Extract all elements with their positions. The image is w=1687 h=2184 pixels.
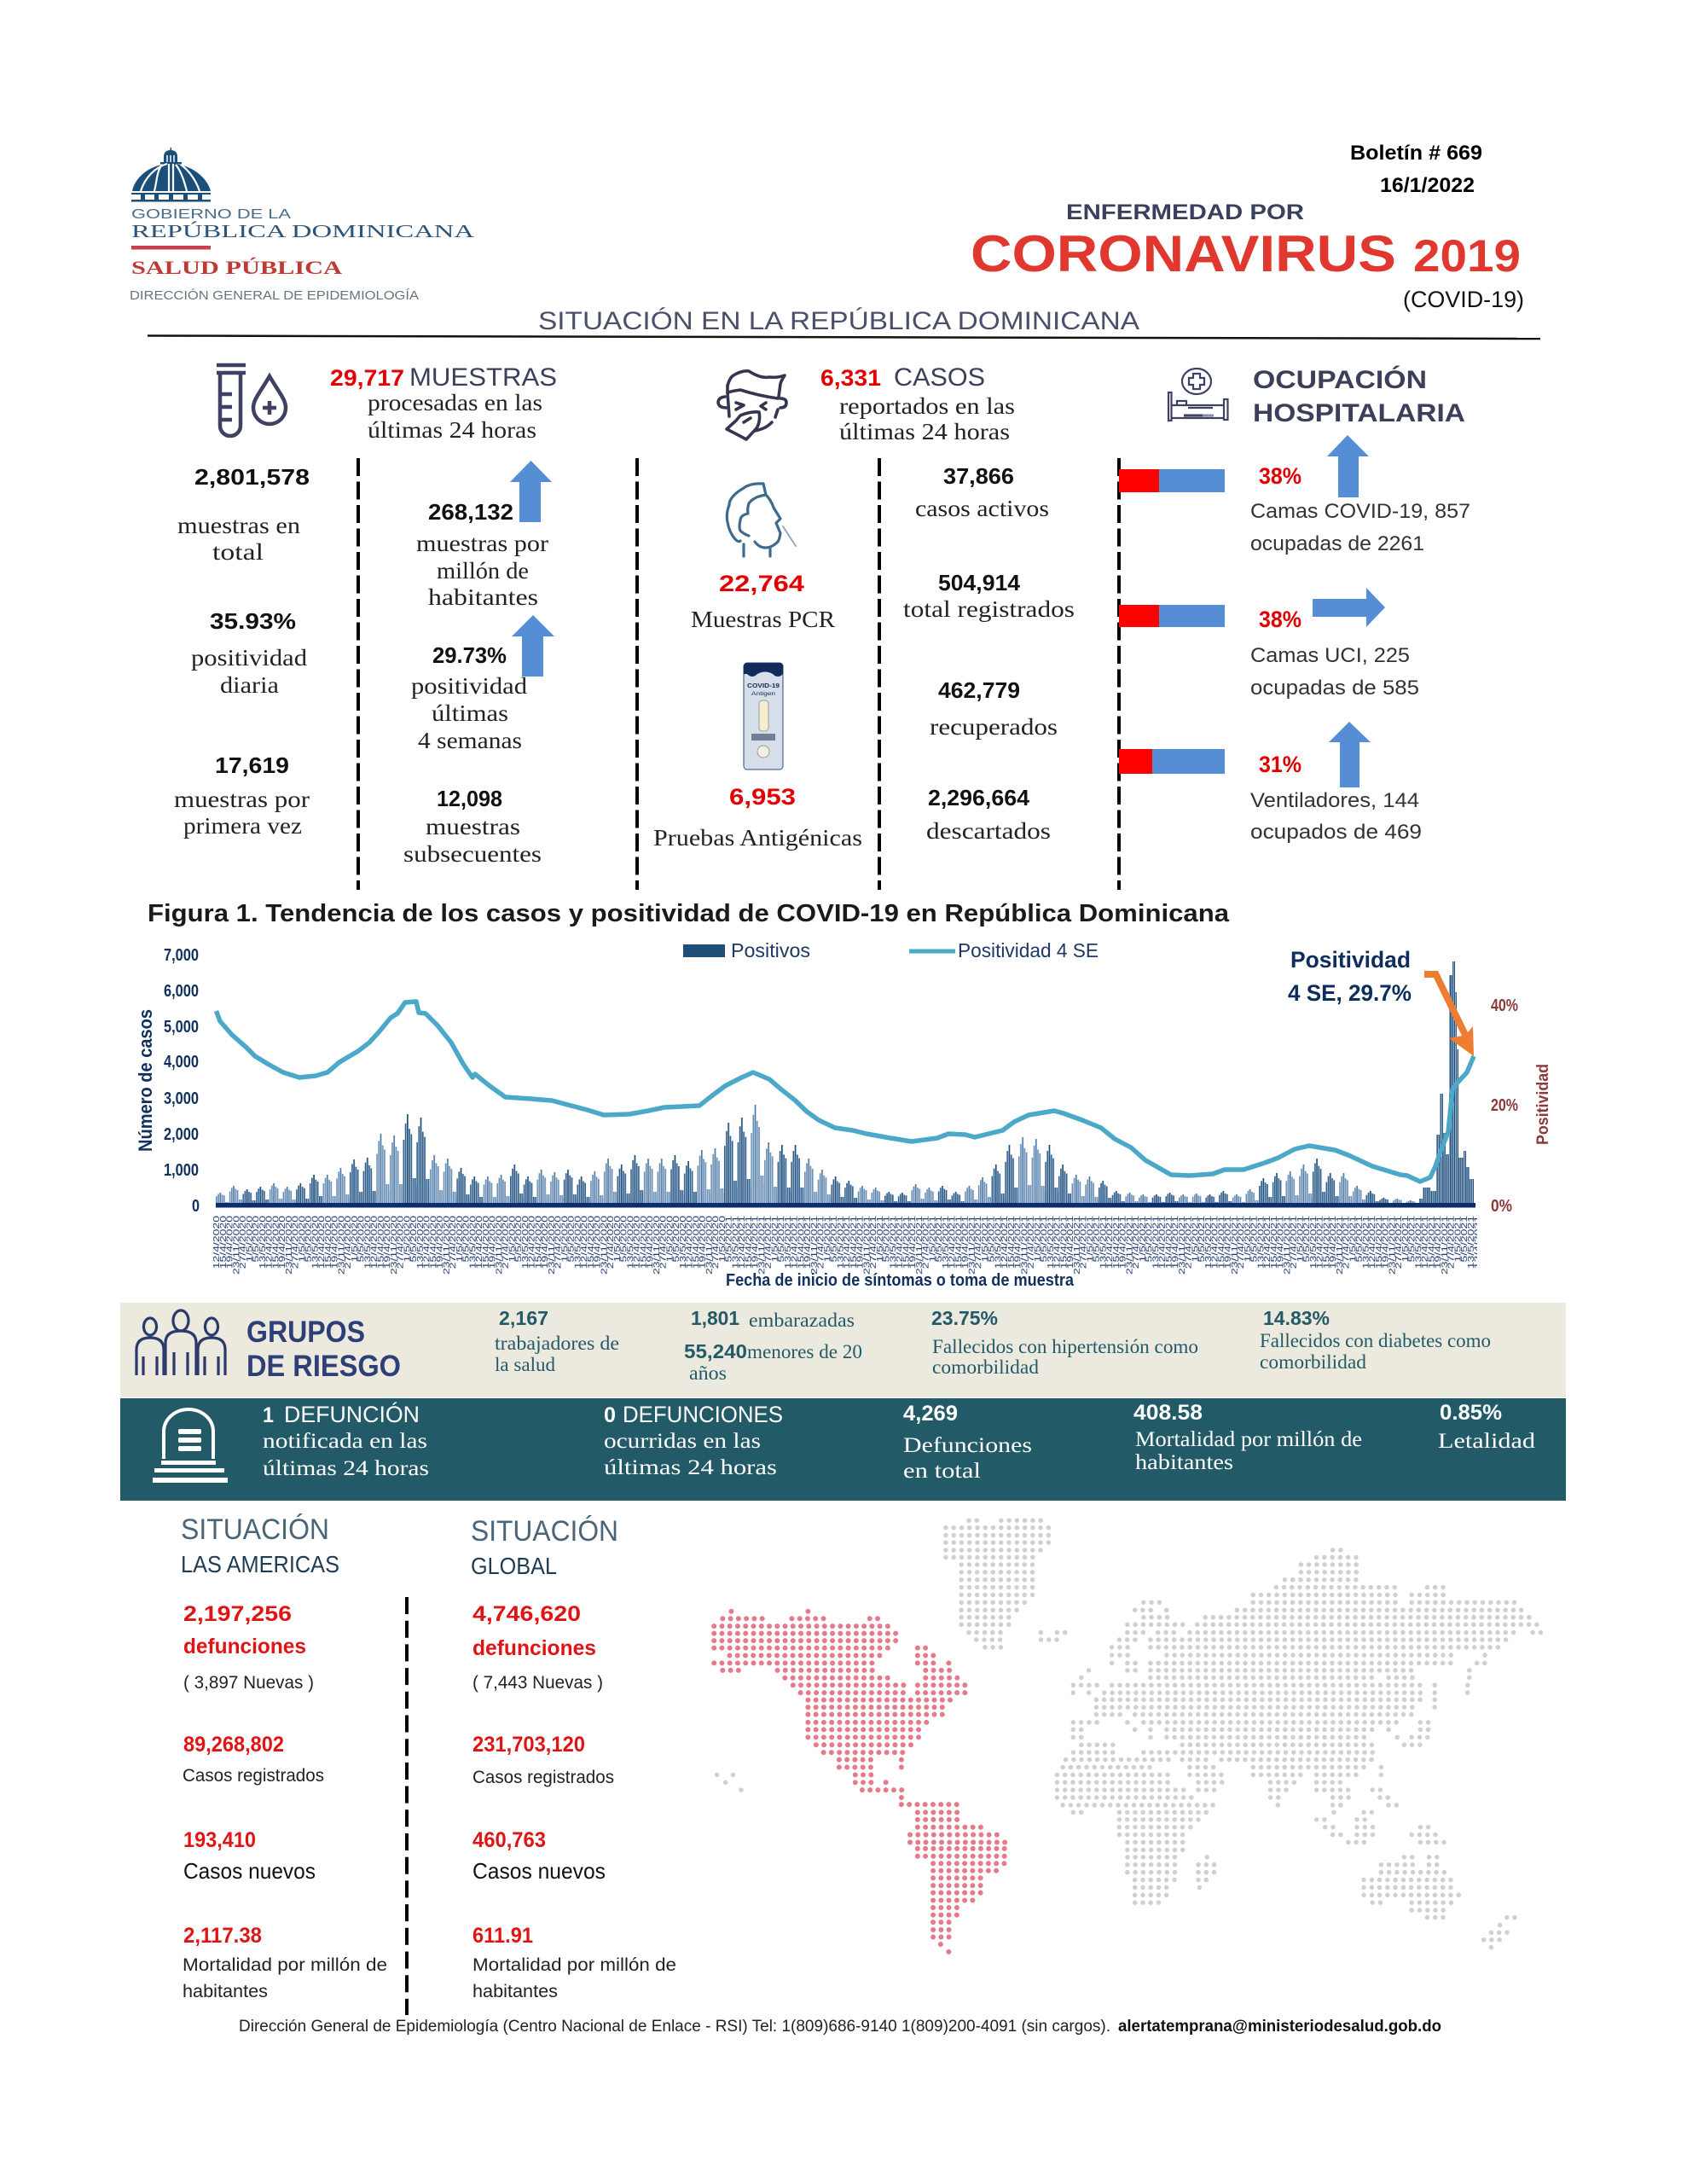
icon: group of people bbox=[136, 1310, 225, 1375]
panel: ocupación hospitalaria: HOSPITALARIA bbox=[1253, 399, 1465, 427]
footer: alertatemprana@ministeriodesalud.gob.do bbox=[1118, 2018, 1441, 2036]
casos heading: 6,331 bbox=[820, 365, 881, 391]
right axis labels: 0% bbox=[1491, 1197, 1512, 1216]
hospital heading: OCUPACIÓN bbox=[1253, 365, 1427, 394]
panel: grupos de riesgo: comorbilidad bbox=[932, 1356, 1040, 1378]
bulletin number and date: 16/1/2022 bbox=[1380, 174, 1475, 197]
stat: hypertension: 23.75% bbox=[931, 1307, 998, 1329]
panel: muestras: diaria bbox=[220, 672, 279, 698]
stat: active cases: 37,866 bbox=[943, 463, 1014, 489]
right axis labels: 40% bbox=[1491, 996, 1518, 1015]
stat: discarded: 2,296,664 bbox=[928, 785, 1030, 810]
arrow: up positivity bbox=[512, 615, 554, 677]
panel: muestras: habitantes bbox=[428, 584, 538, 610]
panel: defunciones: Defunciones bbox=[903, 1434, 1032, 1457]
axis baseline bbox=[216, 1203, 1475, 1208]
panel: muestras: 4 semanas bbox=[418, 728, 522, 753]
panel: casos bbox=[653, 363, 1075, 851]
bar: camas uci bbox=[1119, 605, 1225, 627]
panel: ocupación hospitalaria: Camas COVID-19, 857 bbox=[1250, 500, 1470, 523]
panel: situación las américas: Casos nuevos bbox=[183, 1858, 316, 1884]
panel: grupos de riesgo: Fallecidos con diabetes como bbox=[1260, 1330, 1491, 1351]
panel: situación global: defunciones bbox=[472, 1636, 596, 1660]
left axis labels: 4,000 bbox=[164, 1053, 199, 1072]
heading: SITUACIÓN bbox=[471, 1515, 618, 1548]
arrow: up samples bbox=[510, 461, 552, 522]
panel: grupos de riesgo: trabajadores de bbox=[495, 1333, 619, 1354]
panel: grupos de riesgo: la salud bbox=[495, 1354, 555, 1375]
line: positividad 4 SE bbox=[217, 1002, 1474, 1182]
panel: defunciones bbox=[120, 1398, 1566, 1501]
panel: defunciones: DEFUNCIÓN bbox=[284, 1401, 420, 1427]
header: institutional logo bbox=[130, 148, 475, 303]
panel: muestras: muestras por bbox=[174, 787, 310, 812]
panel: casos: Pruebas Antigénicas bbox=[653, 825, 862, 851]
panel: defunciones: Letalidad bbox=[1438, 1430, 1536, 1453]
panel: defunciones: últimas 24 horas bbox=[604, 1456, 777, 1479]
stat: total samples: 2,801,578 bbox=[194, 464, 310, 490]
chart: casos y positividad bbox=[135, 939, 1552, 1290]
panel: situación las américas: LAS AMERICAS bbox=[181, 1551, 339, 1577]
panel: muestras: muestras por bbox=[416, 531, 548, 556]
stat: total deaths: 4,269 bbox=[903, 1402, 958, 1426]
title: 2019 bbox=[1413, 231, 1521, 282]
left axis labels: 1,000 bbox=[164, 1161, 199, 1180]
muestras heading: 29,717 bbox=[330, 365, 404, 391]
panel: defunciones: habitantes bbox=[1135, 1451, 1233, 1474]
panel: casos: descartados bbox=[926, 818, 1051, 844]
left axis labels: 5,000 bbox=[164, 1018, 199, 1037]
panel: casos: últimas 24 horas bbox=[839, 419, 1010, 444]
icon: sick face with tissue bbox=[718, 371, 786, 439]
panel: casos: reportados en las bbox=[839, 393, 1015, 419]
chart legend: Positividad 4 SE bbox=[958, 939, 1099, 961]
panel: situación global: Mortalidad por millón de bbox=[472, 1955, 676, 1975]
panel: grupos de riesgo: Fallecidos con hipertensión como bbox=[932, 1336, 1198, 1357]
heading: SITUACIÓN bbox=[181, 1513, 329, 1546]
stat: mortality: 408.58 bbox=[1133, 1401, 1203, 1425]
panel: defunciones: notificada en las bbox=[263, 1430, 427, 1453]
bars: positivos bbox=[216, 961, 1474, 1205]
stat: deaths: 2,197,256 bbox=[183, 1602, 292, 1626]
panel: situación global bbox=[471, 1515, 676, 2001]
left axis labels bbox=[135, 946, 200, 1216]
title: CORONAVIRUS bbox=[971, 225, 1396, 282]
stat: subsequent samples: 12,098 bbox=[437, 786, 502, 811]
right axis labels: Positividad bbox=[1534, 1064, 1552, 1145]
panel: situación global: ( 7,443 Nuevas ) bbox=[472, 1673, 603, 1693]
arrow: right icu beds bbox=[1313, 588, 1385, 627]
bar: camas covid bbox=[1119, 469, 1225, 492]
x axis title: Fecha de inicio de síntomas o toma de muestra bbox=[726, 1271, 1075, 1290]
stat: samples per million: 268,132 bbox=[428, 499, 513, 525]
panel: defunciones: ocurridas en las bbox=[604, 1430, 761, 1453]
stat: new cases: 193,410 bbox=[183, 1828, 256, 1852]
icon: test tube and drop bbox=[217, 365, 286, 436]
left axis labels: 3,000 bbox=[164, 1089, 199, 1108]
bulletin number and date bbox=[1350, 142, 1482, 197]
stat: under 20: 55,240 bbox=[684, 1340, 747, 1362]
panel: situación las américas: habitantes bbox=[183, 1982, 268, 2001]
subtitle: SITUACIÓN EN LA REPÚBLICA DOMINICANA bbox=[538, 307, 1139, 335]
left axis labels: 2,000 bbox=[164, 1125, 199, 1144]
panel: ocupación hospitalaria: ocupadas de 2261 bbox=[1250, 532, 1424, 555]
stat: camas uci: 38% bbox=[1259, 607, 1301, 632]
arrow: orange callout bbox=[1424, 971, 1474, 1056]
left axis labels: 6,000 bbox=[164, 982, 199, 1001]
panel: situación las américas: ( 3,897 Nuevas ) bbox=[183, 1673, 314, 1693]
panel: defunciones: en total bbox=[903, 1460, 981, 1483]
panel: casos: casos activos bbox=[915, 496, 1049, 521]
panel: situación global: Casos nuevos bbox=[472, 1858, 606, 1884]
callout: positividad: 4 SE, 29.7% bbox=[1288, 980, 1412, 1006]
grupos heading: GRUPOS bbox=[246, 1316, 365, 1349]
panel: ocupación hospitalaria: ocupadas de 585 bbox=[1250, 677, 1419, 700]
stat: antigen tests: 6,953 bbox=[729, 784, 796, 810]
panel: situación las américas: defunciones bbox=[183, 1635, 306, 1658]
stat: ventiladores: 31% bbox=[1259, 752, 1301, 777]
callout: positividad: Positividad bbox=[1290, 947, 1411, 973]
panel: grupos de riesgo: embarazadas bbox=[749, 1310, 855, 1331]
left axis labels: 0 bbox=[192, 1197, 200, 1216]
icon: tombstone bbox=[153, 1409, 228, 1483]
logo text: GOBIERNO DE LA bbox=[131, 207, 291, 222]
panel: muestras: positividad bbox=[411, 673, 528, 699]
panel: grupos de riesgo: menores de 20 bbox=[747, 1341, 862, 1362]
icon: antigen test cassette: Antigen bbox=[751, 691, 775, 697]
panel: muestras: últimas 24 horas bbox=[368, 417, 536, 443]
panel: casos: total registrados bbox=[903, 596, 1075, 622]
map: rest of world bbox=[717, 1520, 1541, 1948]
stat: daily positivity: 35.93% bbox=[210, 608, 296, 634]
title: (COVID-19) bbox=[1403, 287, 1524, 312]
stat: recovered: 462,779 bbox=[938, 677, 1020, 703]
panel: situación global: Casos registrados bbox=[472, 1768, 614, 1787]
panel: grupos de riesgo bbox=[120, 1303, 1566, 1397]
panel: muestras: positividad bbox=[191, 645, 308, 671]
arrow: up ventilators bbox=[1329, 722, 1371, 787]
header: institutional logo: REPÚBLICA DOMINICANA bbox=[131, 221, 475, 241]
panel: muestras: muestras en bbox=[177, 513, 301, 538]
title bbox=[971, 200, 1524, 312]
right axis labels bbox=[1491, 996, 1552, 1216]
panel: situación las américas bbox=[181, 1513, 387, 2001]
panel: grupos de riesgo: comorbilidad bbox=[1260, 1351, 1367, 1373]
panel: defunciones: DEFUNCIONES bbox=[623, 1402, 783, 1427]
panel: muestras: primera vez bbox=[183, 813, 302, 839]
panel: situación global: GLOBAL bbox=[471, 1553, 557, 1579]
dotted world map bbox=[711, 1519, 1543, 1955]
panel: muestras: subsecuentes bbox=[403, 841, 542, 867]
panel: casos: CASOS bbox=[894, 363, 985, 392]
stat: new cases: 460,763 bbox=[472, 1828, 546, 1852]
stat: registered cases: 89,268,802 bbox=[183, 1733, 284, 1757]
panel: muestras: MUESTRAS bbox=[409, 363, 557, 392]
stat: 4 week positivity: 29.73% bbox=[432, 642, 507, 668]
stat: PCR samples: 22,764 bbox=[719, 571, 804, 596]
stat: camas covid: 38% bbox=[1259, 463, 1301, 489]
dashed column dividers bbox=[358, 458, 1119, 890]
map: the americas bbox=[714, 1612, 1012, 1952]
stat: mortality: 611.91 bbox=[472, 1924, 533, 1948]
panel: situación global: habitantes bbox=[472, 1982, 558, 2001]
panel: defunciones: últimas 24 horas bbox=[263, 1457, 429, 1480]
stat: health workers: 2,167 bbox=[499, 1307, 548, 1329]
stat: deaths: 4,746,620 bbox=[472, 1602, 581, 1626]
right axis labels: 20% bbox=[1491, 1096, 1518, 1115]
footer: Dirección General de Epidemiología (Centro Nacional de Enlace - RSI) Tel: 1(809)686-9140 1(809)200-4091 (sin cargos). bbox=[239, 2018, 1110, 2036]
stat: first time samples: 17,619 bbox=[215, 752, 289, 778]
header: institutional logo: DIRECCIÓN GENERAL DE EPIDEMIOLOGÍA bbox=[130, 288, 419, 303]
panel: muestras: total bbox=[212, 539, 264, 565]
bulletin number and date: Boletín # 669 bbox=[1350, 142, 1482, 165]
stat: diabetes: 14.83% bbox=[1263, 1307, 1330, 1329]
icon: antigen test cassette bbox=[744, 663, 783, 770]
panel: casos: recuperados bbox=[930, 714, 1058, 740]
panel: casos: Muestras PCR bbox=[691, 607, 835, 632]
panel: situación las américas: Mortalidad por millón de bbox=[183, 1955, 387, 1975]
icon: hospital bed bbox=[1168, 369, 1228, 421]
stat: mortality: 2,117.38 bbox=[183, 1924, 262, 1948]
figure heading: Figura 1. Tendencia de los casos y positividad de COVID-19 en República Dominicana bbox=[148, 900, 1230, 927]
stat: occurred deaths: 0 bbox=[604, 1403, 616, 1427]
arrow: up covid beds bbox=[1327, 435, 1369, 497]
stat: notified deaths: 1 bbox=[263, 1403, 274, 1427]
chart legend: Positivos bbox=[731, 939, 810, 961]
left axis labels: Número de casos bbox=[135, 1009, 156, 1152]
panel: muestras: millón de bbox=[437, 558, 529, 584]
callout: positividad bbox=[1288, 947, 1412, 1006]
panel: grupos de riesgo: años bbox=[689, 1362, 727, 1384]
panel: muestras: procesadas en las bbox=[368, 390, 542, 415]
panel: ocupación hospitalaria bbox=[1119, 365, 1470, 844]
header: institutional logo: SALUD PÚBLICA bbox=[131, 257, 342, 278]
panel: grupos de riesgo: DE RIESGO bbox=[246, 1350, 401, 1383]
title: ENFERMEDAD POR bbox=[1066, 200, 1304, 224]
x axis date labels bbox=[213, 1214, 1477, 1281]
icon: antigen test cassette: COVID-19 bbox=[747, 683, 780, 689]
stat: total registered: 504,914 bbox=[938, 570, 1021, 595]
panel: ocupación hospitalaria: Ventiladores, 144 bbox=[1250, 789, 1419, 812]
icon: nasal swab bbox=[727, 484, 796, 556]
panel: defunciones: Mortalidad por millón de bbox=[1135, 1428, 1362, 1451]
panel: muestras bbox=[174, 363, 557, 867]
panel: muestras: últimas bbox=[432, 700, 508, 726]
panel: ocupación hospitalaria: Camas UCI, 225 bbox=[1250, 644, 1410, 667]
bar: ventiladores bbox=[1119, 749, 1225, 774]
panel: ocupación hospitalaria: ocupados de 469 bbox=[1250, 821, 1422, 844]
stat: lethality: 0.85% bbox=[1440, 1401, 1502, 1425]
panel: situación las américas: Casos registrados bbox=[183, 1766, 324, 1786]
chart legend bbox=[683, 939, 1099, 961]
stat: registered cases: 231,703,120 bbox=[472, 1733, 585, 1757]
left axis labels: 7,000 bbox=[164, 946, 199, 965]
panel: muestras: muestras bbox=[426, 814, 520, 839]
stat: pregnant: 1,801 bbox=[691, 1307, 739, 1329]
icon: dome bbox=[131, 148, 211, 201]
